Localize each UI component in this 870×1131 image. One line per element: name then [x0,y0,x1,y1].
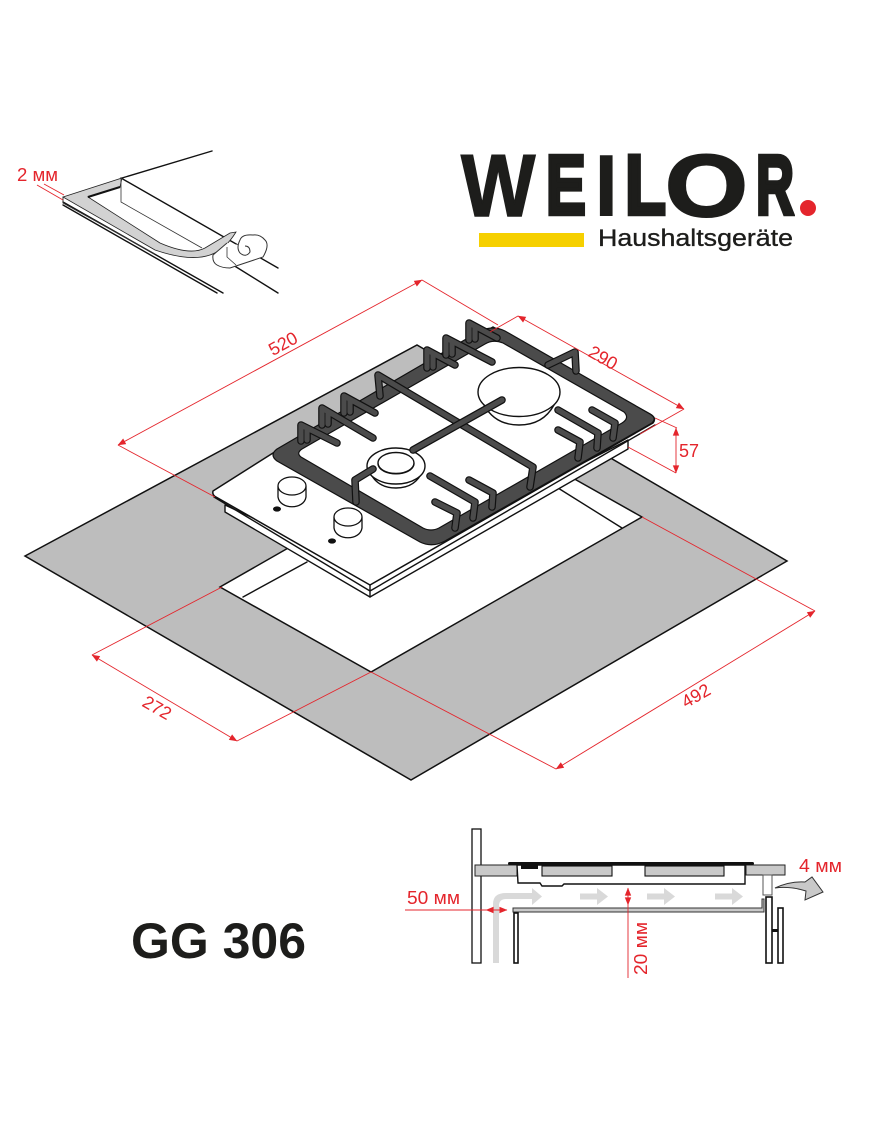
section: worktop [475,865,785,876]
dimension: cutout 492 [371,517,815,769]
seal thickness label: 2 мм [17,165,58,185]
seal detail diagram [17,151,278,293]
control knob: right [328,508,362,544]
dimension: 20 mm leader [627,905,629,978]
burner: large [478,368,560,425]
lower fingers [355,410,615,528]
seal detail: worktop lines [63,151,278,293]
section: hob top plate [508,862,754,865]
hob plate [213,327,654,585]
cross bars [378,375,533,487]
logo yellow bar [479,233,584,247]
dimension: 20 mm arrow [627,888,629,905]
seal thickness marks [37,184,64,200]
pan support frame [273,328,654,545]
seal detail: gray seal strip [63,178,236,258]
burner: small [367,448,425,488]
logo wordmark: L [625,138,666,232]
dimension: height 57 [628,418,699,473]
dimension: width 520 [118,280,498,497]
logo: dot, bar and tagline [479,200,816,252]
section: bracket [763,875,772,895]
dimension: 50 mm line [405,909,486,911]
cutout inner edges [243,488,622,597]
airflow arrows [493,888,743,963]
logo wordmark [460,136,795,234]
dimension: 50 mm arrow [486,909,507,911]
section: control block [521,865,538,869]
hob [213,323,655,597]
dimension: depth 290: 290 [585,342,621,374]
upper-left fingers [301,323,576,443]
ventilation section diagram [405,829,842,978]
seal detail: tape roll [213,235,267,268]
dimension: cutout 272: 272 [139,692,175,724]
logo wordmark: O [665,136,748,234]
logo wordmark: R [756,138,794,232]
worktop with cutout [25,345,787,780]
hob base [225,440,628,597]
dimension: cutout 492: 492 [678,680,714,712]
dimension: height 57: 57 [679,441,699,461]
logo wordmark: W [461,136,535,234]
logo red dot [800,200,816,216]
section: burner boxes [542,866,724,876]
dimension: width 520: 520 [265,328,301,360]
section: left wall [472,829,481,963]
logo tagline: Haushaltsgeräte [598,225,793,252]
logo wordmark: I [594,136,618,234]
logo wordmark: E [546,138,585,232]
model name: GG 306 [131,913,306,969]
label: 20 mm: 20 мм [631,922,651,975]
section: shelf [513,899,764,912]
control knob: left [273,477,306,512]
dimension: depth 290 [490,316,684,434]
section: cabinet walls [514,897,783,963]
label: 50 mm: 50 мм [407,888,460,908]
dimension: cutout 272 [92,587,371,741]
exhaust arrow [775,877,823,900]
label: 4 mm: 4 мм [799,856,842,876]
section: hob body [517,865,745,886]
